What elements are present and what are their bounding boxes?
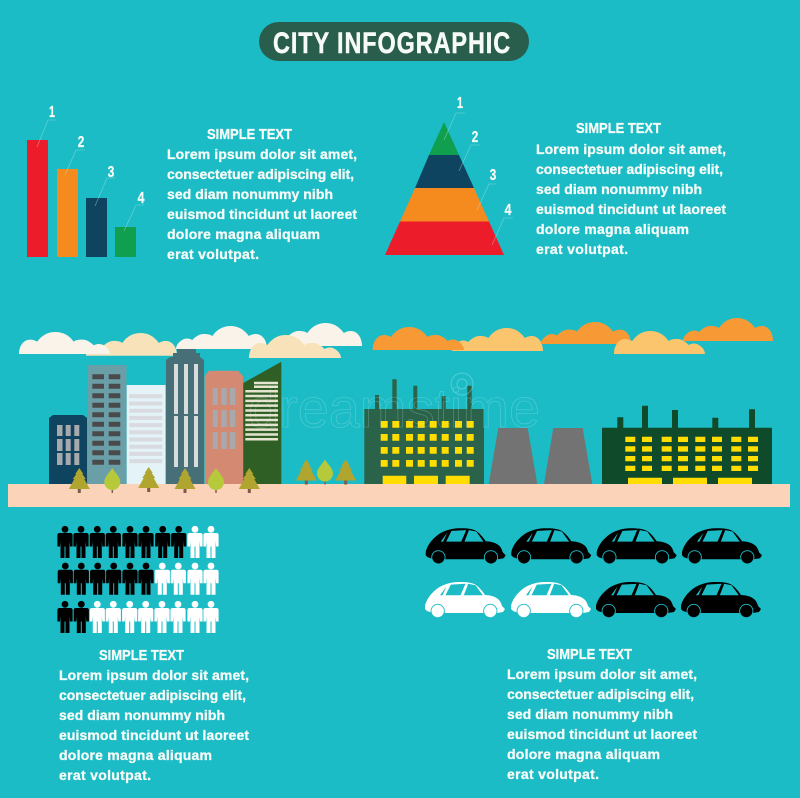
text block: top right: euismod tincidunt ut laoreet [536,201,726,217]
pyramid chart: 3 [490,167,496,184]
text block: bottom right: dolore magna aliquam [507,746,660,762]
trees: foreground row [69,467,260,493]
cars row 1 [426,528,762,564]
text block: top left: sed diam nonummy nibh [167,186,333,202]
building: grey-blue tower [88,365,126,484]
trees: background group [296,460,356,484]
text block: top left: euismod tincidunt ut laoreet [167,206,357,222]
text block: top right [536,121,726,257]
bar chart: 2 [78,134,84,151]
text block: top right: consectetuer adipiscing elit, [536,161,723,177]
text block: bottom left: consectetuer adipiscing elit, [59,687,246,703]
people row 3: 2 of 10 [57,601,219,633]
text block: bottom left: SIMPLE TEXT [99,648,184,664]
text block: top right: sed diam nonummy nibh [536,181,702,197]
people row 1: 8 of 10 [57,526,219,558]
text block: bottom right: SIMPLE TEXT [547,647,632,663]
pyramid chart: 2 [472,129,478,146]
text block: bottom right: euismod tincidunt ut laoreet [507,726,697,742]
watermark: dreamstime [248,377,540,439]
text block: bottom right: consectetuer adipiscing elit, [507,686,694,702]
text block: bottom right: Lorem ipsum dolor sit amet, [507,666,697,682]
cars pictogram [425,528,762,618]
text block: top left: dolore magna aliquam [167,226,320,242]
text block: top left: SIMPLE TEXT [207,127,292,143]
cooling towers [489,428,592,484]
text block: bottom right [507,647,697,782]
pyramid chart: 4 [504,202,512,219]
text block: top left: erat volutpat. [167,246,259,262]
text block: top right: Lorem ipsum dolor sit amet, [536,141,726,157]
text block: top right: erat volutpat. [536,241,628,257]
bar chart: 1 [49,104,55,121]
text block: bottom right: erat volutpat. [507,766,599,782]
ground [8,484,790,507]
clouds: orange [373,318,773,354]
pyramid chart [385,95,513,255]
pyramid chart: 1 [457,95,463,112]
people row 2: 6 of 10 [58,563,219,595]
title: CITY INFOGRAPHIC [273,26,510,60]
text block: top left: consectetuer adipiscing elit, [167,166,354,182]
building: green slanted tower [243,362,281,484]
text block: top left: Lorem ipsum dolor sit amet, [167,146,357,162]
clouds: white and cream [19,323,362,358]
building: dark teal skyscraper [166,349,204,484]
text block: bottom left: Lorem ipsum dolor sit amet, [59,667,249,683]
text block: top right: dolore magna aliquam [536,221,689,237]
cars row 2 [425,582,761,618]
bar chart: 3 [108,164,114,181]
people pictogram [57,526,219,633]
text block: bottom left: euismod tincidunt ut laoreet [59,727,249,743]
building: pale tower [127,385,166,484]
bar chart [27,104,145,257]
building: salmon tower [205,371,243,484]
building: navy tower [49,415,87,484]
text block: top left [167,127,357,262]
factory: left [364,379,484,484]
text block: bottom left: dolore magna aliquam [59,747,212,763]
text block: bottom left: erat volutpat. [59,767,151,783]
bar chart: 4 [138,190,145,207]
factory: right [602,406,772,484]
text block: bottom left: sed diam nonummy nibh [59,707,225,723]
text block: bottom left [59,648,249,783]
text block: top right: SIMPLE TEXT [576,121,661,137]
text block: bottom right: sed diam nonummy nibh [507,706,673,722]
